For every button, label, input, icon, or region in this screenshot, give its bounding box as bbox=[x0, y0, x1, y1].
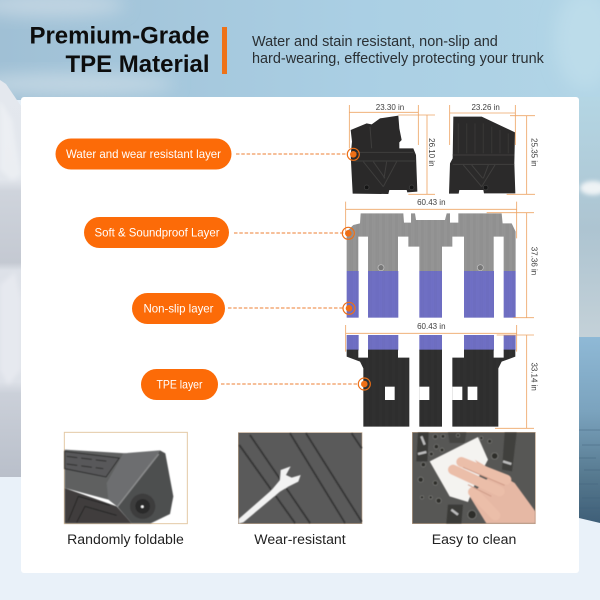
label: TPE layer bbox=[141, 369, 218, 400]
front left mat bbox=[351, 116, 417, 194]
dimension: 26.10 in bbox=[398, 115, 436, 194]
subtitle: Water and stain resistant, non-slip and bbox=[252, 34, 498, 50]
label: TPE layer: TPE layer bbox=[156, 377, 203, 391]
dimension: 25.35 in bbox=[507, 116, 539, 194]
rear floor mats with dimensions bbox=[346, 198, 539, 428]
front right mat bbox=[449, 117, 515, 194]
dimension: 60.43 in lower: 60.43 in bbox=[417, 322, 446, 331]
leader line: TPE layer bbox=[221, 383, 359, 385]
label: water and wear resistant layer: Water and wear resistant layer bbox=[66, 147, 221, 161]
marker: non-slip layer bbox=[343, 302, 355, 314]
third row mat: black TPE layer bbox=[347, 350, 515, 427]
label: soft and soundproof layer bbox=[84, 217, 229, 248]
title bbox=[29, 22, 210, 78]
dimension: 60.43 in upper bbox=[346, 198, 517, 238]
dimension: 60.43 in upper: 60.43 in bbox=[417, 198, 446, 207]
dimension: 37.36 in bbox=[487, 213, 539, 318]
leader line: soft and soundproof layer bbox=[234, 232, 344, 234]
title: TPE Material bbox=[65, 51, 210, 78]
panel: white content card bbox=[21, 97, 579, 573]
third row mat cut-outs bbox=[385, 387, 477, 400]
dimension: 33.14 in bbox=[495, 335, 539, 428]
third row mat: purple layer bbox=[347, 335, 516, 350]
leader line: water and wear resistant layer bbox=[236, 153, 348, 155]
dimension: 25.35 in: 25.35 in bbox=[530, 138, 539, 167]
caption: randomly foldable: Randomly foldable bbox=[67, 531, 184, 547]
dimension: 23.30 in bbox=[349, 103, 418, 148]
photo: randomly foldable bbox=[64, 432, 187, 524]
dimension: 26.10 in: 26.10 in bbox=[427, 138, 436, 167]
marker: soft and soundproof layer bbox=[342, 227, 354, 239]
label: soft and soundproof layer: Soft & Soundproof Layer bbox=[94, 225, 220, 239]
mat fasteners bbox=[378, 265, 483, 271]
dimension: 60.43 in lower bbox=[346, 322, 517, 352]
subtitle bbox=[252, 34, 545, 67]
marker: TPE layer bbox=[358, 378, 370, 390]
marker: water and wear resistant layer bbox=[347, 148, 359, 160]
subtitle: hard-wearing, effectively protecting your trunk bbox=[252, 51, 545, 67]
label: non-slip layer: Non-slip layer bbox=[144, 301, 214, 315]
leader line: non-slip layer bbox=[228, 307, 344, 309]
label: water and wear resistant layer bbox=[56, 138, 232, 170]
caption: easy to clean: Easy to clean bbox=[432, 531, 516, 547]
dimension: 23.30 in: 23.30 in bbox=[376, 103, 404, 112]
dimension: 33.14 in: 33.14 in bbox=[530, 362, 539, 391]
accent bar bbox=[222, 27, 227, 74]
label: non-slip layer bbox=[132, 293, 225, 324]
dimension: 23.26 in bbox=[450, 103, 515, 145]
dimension: 37.36 in: 37.36 in bbox=[530, 247, 539, 275]
photo: wear-resistant bbox=[238, 433, 362, 524]
second row mat: purple non-slip layer bbox=[347, 271, 516, 318]
title: Premium-Grade bbox=[29, 22, 210, 50]
caption: wear-resistant: Wear-resistant bbox=[254, 531, 346, 547]
second row mat: grey soundproof layer bbox=[347, 213, 516, 271]
front floor mats with dimensions bbox=[349, 103, 539, 194]
photo: easy to clean bbox=[412, 432, 535, 524]
dimension: 23.26 in: 23.26 in bbox=[471, 103, 500, 112]
